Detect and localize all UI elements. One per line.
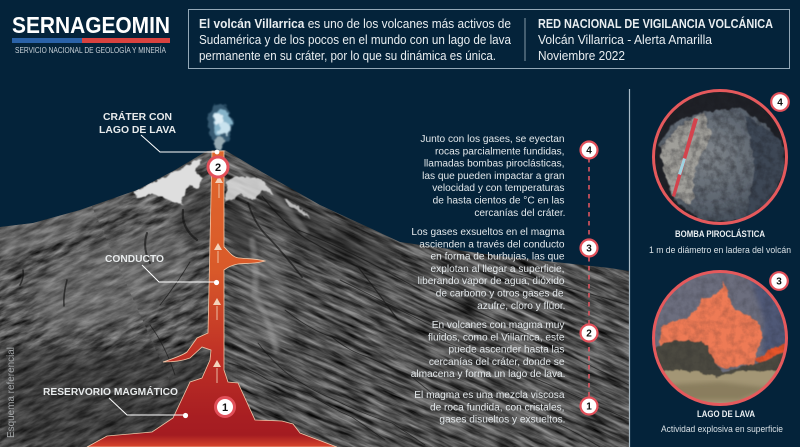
step 4 badge xyxy=(580,142,598,158)
network and alert text xyxy=(538,16,773,63)
step 3 text: Los gases exsueltos en el magma xyxy=(411,227,565,238)
step 2 text: cercanías del cráter, donde se xyxy=(429,357,565,368)
step 4 text: llamadas bombas piroclásticas, xyxy=(424,159,564,170)
step 4 text: Junto con los gases, se eyectan xyxy=(420,134,564,145)
step 2 badge xyxy=(580,324,598,342)
magma conduit and reservoir xyxy=(87,151,337,447)
step 1 badge xyxy=(580,398,598,414)
header box xyxy=(188,10,790,68)
step 1 text: de roca fundida, con cristales, xyxy=(430,402,564,413)
photo 3 badge: 3 xyxy=(776,277,782,288)
caption: lago de lava: LAGO DE LAVA xyxy=(697,409,755,419)
badge 2 on conduit xyxy=(208,157,228,177)
photo: bomba piroclástica xyxy=(652,89,788,225)
step 4 text: cercanías del cráter. xyxy=(474,208,566,219)
snow cap xyxy=(135,158,312,218)
caption: bomba piroclástica: BOMBA PIROCLÁSTICA xyxy=(675,229,765,239)
photo 4 badge: 4 xyxy=(777,98,783,109)
network and alert text: RED NACIONAL DE VIGILANCIA VOLCÁNICA xyxy=(538,16,773,31)
step 1 text: gases disueltos y exsueltos. xyxy=(439,415,566,426)
caption: lago de lava: Actividad explosiva en superficie xyxy=(661,424,783,434)
photo 3 badge xyxy=(770,272,788,290)
step 4 text xyxy=(420,134,566,219)
logo: SERNAGEOMIN: SERNAGEOMIN xyxy=(12,12,170,38)
intro text: El volcán Villarrica es uno de los volcanes más activos de xyxy=(199,17,511,31)
badge 2 on conduit: 2 xyxy=(215,162,221,174)
step 3 badge xyxy=(580,240,598,256)
caption: bomba piroclástica xyxy=(649,229,791,255)
network and alert text: Volcán Villarrica - Alerta Amarilla xyxy=(538,33,712,47)
badge 1 on reservoir: 1 xyxy=(222,402,228,414)
step 3 text xyxy=(411,227,566,312)
volcano terrain xyxy=(0,148,629,447)
network and alert text: Noviembre 2022 xyxy=(538,49,625,63)
dark gullies xyxy=(20,196,629,447)
step 3 text: de carbono y otros gases de xyxy=(436,288,564,300)
label: conducto: CONDUCTO xyxy=(105,254,164,265)
logo: SERNAGEOMIN: SERVICIO NACIONAL DE GEOLOGÍA Y MINERÍA xyxy=(15,46,167,55)
label: cráter con lago de lava: CRÁTER CON xyxy=(103,110,172,123)
step 2 text: almacena y forma un lago de lava. xyxy=(411,369,566,380)
caption: bomba piroclástica: 1 m de diámetro en ladera del volcán xyxy=(649,245,791,255)
label: reservorio magmático: RESERVORIO MAGMÁTICO xyxy=(43,385,178,398)
step 2 badge: 2 xyxy=(586,329,592,340)
step 2 text xyxy=(411,320,566,380)
logo: SERNAGEOMIN xyxy=(12,12,170,55)
intro text: permanente en su cráter, por lo que su dinámica es única. xyxy=(199,49,496,63)
step 4 text: las que pueden impactar a gran xyxy=(422,171,564,182)
step 2 text: puede ascender hasta las xyxy=(449,345,564,356)
intro text xyxy=(199,17,511,63)
photo: lago de lava xyxy=(652,270,788,406)
smoke plume xyxy=(208,104,232,150)
photo 4 badge xyxy=(771,93,789,111)
label: reservorio magmático xyxy=(43,385,188,418)
label: conducto xyxy=(105,254,219,285)
step 3 text: ascienden a través del conducto xyxy=(419,239,565,250)
note: esquema referencial: Esquema referencial xyxy=(6,347,17,438)
label: cráter con lago de lava xyxy=(99,110,219,154)
step 3 badge: 3 xyxy=(586,244,592,255)
step 3 text: en forma de burbujas, las que xyxy=(431,252,565,263)
step 4 text: de hasta cientos de °C en las xyxy=(433,196,564,206)
light ridges xyxy=(30,185,565,440)
step 3 text: liberando vapor de agua, dióxido xyxy=(418,276,565,287)
step 4 text: velocidad y con temperaturas xyxy=(432,183,564,194)
step 3 text: azufre, cloro y flúor. xyxy=(477,301,566,312)
vertical divider xyxy=(628,89,630,447)
bubble arrows xyxy=(213,176,223,383)
step 1 text: El magma es una mezcla viscosa xyxy=(414,390,565,401)
step 2 text: En volcanes con magma muy xyxy=(432,320,565,331)
badge 1 on reservoir xyxy=(216,398,234,416)
caption: lago de lava xyxy=(661,409,783,434)
step 1 text xyxy=(414,390,566,426)
step 4 text: rocas parcialmente fundidas, xyxy=(435,146,564,157)
step 2 text: fluidos, como el Villarrica, este xyxy=(428,332,565,343)
step 3 text: explotan al llegar a superficie, xyxy=(431,264,564,275)
step 1 badge: 1 xyxy=(586,402,592,413)
intro text: Sudamérica y de los pocos en el mundo con un lago de lava xyxy=(199,33,511,47)
step 4 badge: 4 xyxy=(586,146,592,157)
label: cráter con lago de lava: LAGO DE LAVA xyxy=(99,125,176,136)
dashed timeline xyxy=(588,158,590,398)
